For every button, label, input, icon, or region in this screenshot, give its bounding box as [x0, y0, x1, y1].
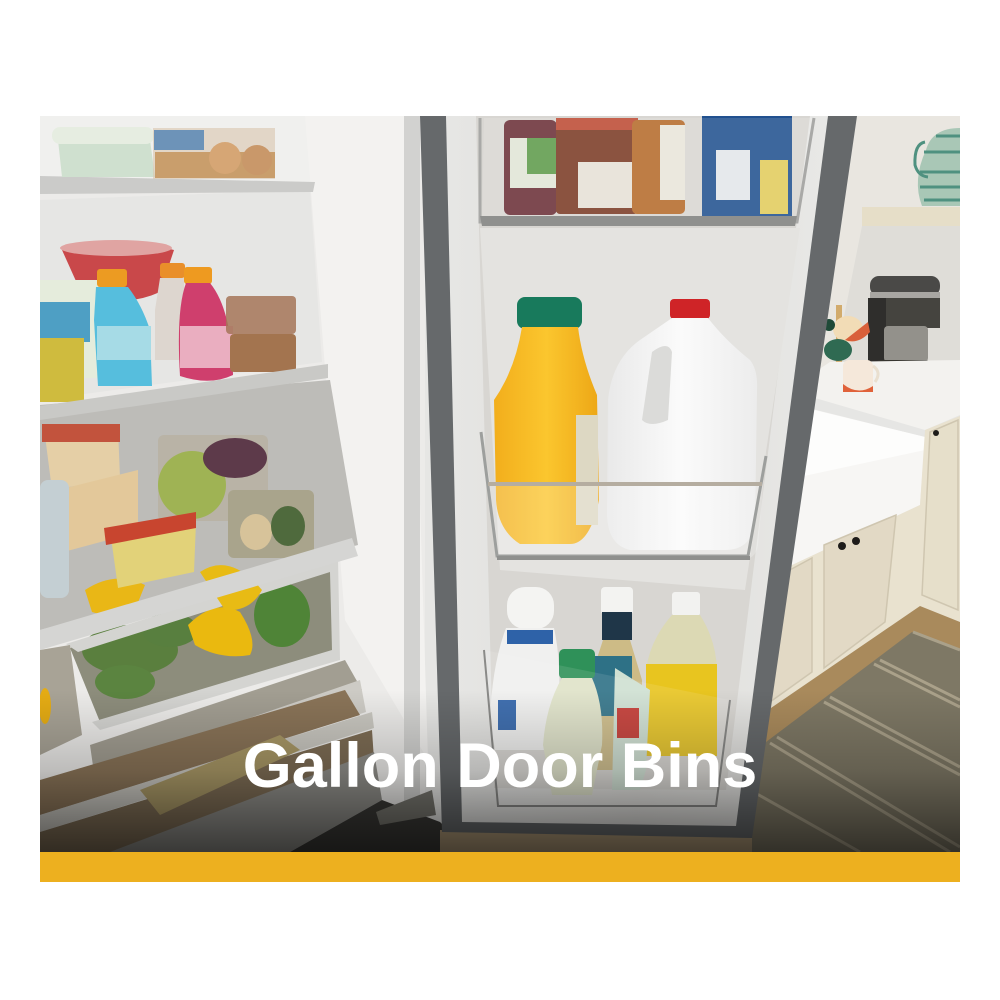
strawberries [60, 240, 174, 301]
clear drink [155, 263, 185, 360]
creamer bottle [490, 587, 559, 750]
vinegar bottle [646, 592, 717, 756]
bottom shade [40, 690, 960, 852]
pink drink [179, 267, 233, 381]
photo: open refrigerator [39, 116, 960, 856]
mug tree [824, 305, 870, 362]
shelf edge [40, 364, 328, 420]
floor below door [440, 830, 752, 852]
kitchen background [737, 128, 960, 852]
blue drink [94, 269, 152, 386]
hinge [376, 790, 436, 825]
grapes [158, 435, 268, 521]
orange juice bottle [494, 297, 599, 544]
green cap bottle [543, 649, 602, 795]
egg carton [153, 128, 275, 179]
water bottle [40, 480, 69, 598]
milk gallon [607, 299, 757, 550]
counter mug [843, 360, 878, 392]
shelf edge [40, 538, 358, 650]
freezer compartment [39, 116, 470, 856]
crisper drawer [39, 558, 340, 755]
dressing bottle [590, 587, 642, 770]
door frame [420, 116, 857, 838]
yellow bar [40, 852, 960, 882]
wall shelf [862, 207, 960, 226]
counter [815, 360, 960, 430]
tub [69, 470, 138, 550]
middle shelf items [40, 240, 328, 420]
produce tub [40, 338, 84, 402]
middle door bin [481, 430, 766, 560]
green container [52, 127, 155, 177]
cabinets [768, 416, 960, 710]
door liner [446, 116, 828, 826]
carton [76, 280, 100, 296]
striped rug [752, 630, 960, 852]
freezer drawers [40, 660, 470, 852]
title: Gallon Door Bins [243, 731, 757, 801]
small packet [612, 668, 650, 790]
deli boxes [226, 296, 296, 372]
infographic [40, 116, 960, 882]
pepper [188, 607, 252, 656]
tub [42, 424, 120, 490]
wraps [228, 490, 314, 558]
bottom door bin bottles [484, 587, 730, 806]
top shelf [40, 127, 315, 194]
open door [420, 116, 857, 838]
farmhouse sink [790, 408, 925, 566]
top door bin [480, 116, 814, 226]
wood floor [766, 606, 960, 742]
yellow tub [104, 512, 196, 588]
coffee maker [868, 276, 940, 362]
bottom bin [484, 650, 730, 806]
peppers [85, 579, 145, 615]
lower shelf items [40, 424, 358, 650]
striped pitcher [915, 128, 960, 206]
